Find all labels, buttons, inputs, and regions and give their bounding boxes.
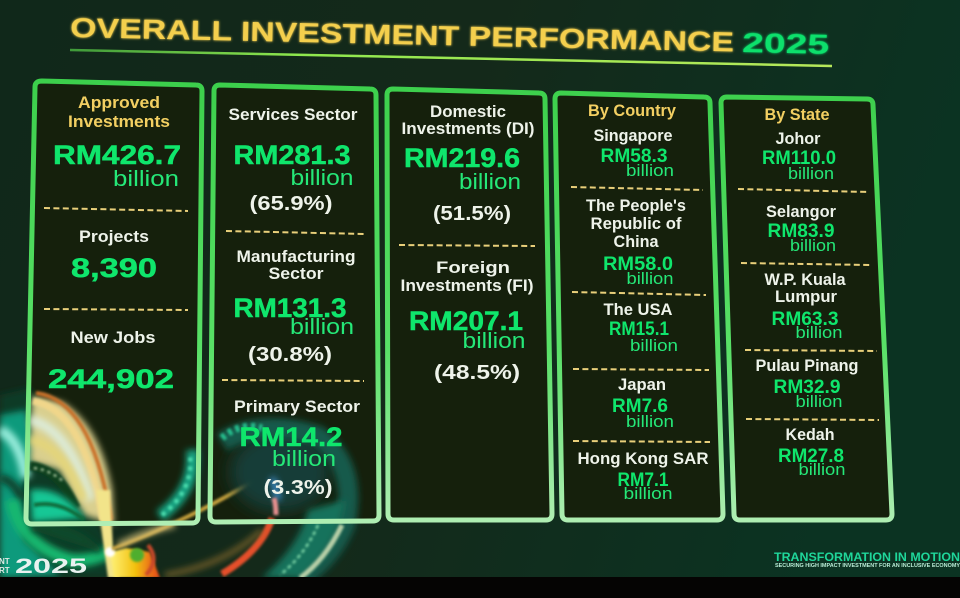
label: domestic investments: Domestic bbox=[430, 102, 506, 121]
panel: by country: China bbox=[614, 232, 659, 251]
panel: by state: billion bbox=[788, 164, 834, 183]
panel: domestic and foreign: Investments (FI) bbox=[400, 276, 534, 295]
panel: sectors: billion bbox=[290, 314, 354, 339]
value: services: RM281.3 bbox=[234, 140, 350, 170]
title year: 2025 bbox=[742, 27, 830, 60]
footer: tagline right: TRANSFORMATION IN MOTION bbox=[774, 552, 960, 564]
title underline bbox=[70, 50, 832, 66]
panel: sectors bbox=[210, 85, 379, 522]
panel: domestic and foreign bbox=[387, 89, 552, 520]
entry: hong kong: Hong Kong SAR bbox=[578, 449, 708, 468]
footer: report label left bbox=[0, 555, 87, 578]
panel: domestic and foreign: billion bbox=[459, 169, 521, 194]
panel: by state bbox=[721, 97, 892, 520]
panel: domestic and foreign: billion bbox=[462, 328, 526, 353]
panel: by state: billion bbox=[796, 323, 842, 342]
panel: by state: RM27.8 bbox=[778, 446, 844, 467]
label: projects: Projects bbox=[79, 227, 149, 246]
panel: by country: RM7.1 bbox=[618, 470, 669, 491]
value: manufacturing: RM131.3 bbox=[234, 293, 346, 323]
entry: singapore: Singapore bbox=[594, 126, 672, 145]
label: foreign investments: Foreign bbox=[436, 258, 510, 277]
panel: by country: RM58.0 bbox=[603, 254, 673, 275]
panel: by country: RM58.3 bbox=[600, 146, 668, 167]
panel: sectors: (65.9%) bbox=[250, 193, 332, 215]
swirl artwork bbox=[0, 388, 348, 578]
title bbox=[70, 12, 830, 60]
panel: by state: RM32.9 bbox=[774, 377, 840, 398]
panel: by state: RM83.9 bbox=[768, 221, 834, 242]
panel: by state: RM63.3 bbox=[772, 309, 838, 330]
value: primary: RM14.2 bbox=[240, 422, 342, 452]
entry: selangor: Selangor bbox=[766, 202, 836, 221]
panel: by country: Republic of bbox=[590, 214, 682, 233]
panel: by country: RM15.1 bbox=[609, 319, 669, 340]
label: manufacturing sector: Manufacturing bbox=[236, 247, 356, 266]
value: approved amount: RM426.7 bbox=[53, 140, 181, 170]
entry: kuala lumpur: W.P. Kuala bbox=[764, 270, 846, 289]
footer year: 2025 bbox=[15, 555, 87, 578]
label: new jobs: New Jobs bbox=[70, 328, 156, 347]
panel: domestic and foreign: (51.5%) bbox=[433, 203, 511, 225]
panel: approved investments: Investments bbox=[68, 112, 170, 131]
panel: sectors: billion bbox=[290, 165, 354, 190]
panel: by state: RM110.0 bbox=[762, 148, 836, 169]
panel: by state: billion bbox=[790, 236, 836, 255]
entry: kedah: Kedah bbox=[786, 425, 834, 444]
value: new jobs: 244,902 bbox=[48, 364, 174, 394]
panel: approved investments bbox=[26, 81, 202, 524]
panel: sectors: (3.3%) bbox=[264, 477, 332, 499]
panel: by country: billion bbox=[624, 484, 672, 503]
panel: by country: RM7.6 bbox=[612, 396, 668, 417]
heading: by state: By State bbox=[764, 105, 830, 124]
value: domestic: RM219.6 bbox=[404, 143, 520, 173]
panel: sectors: (30.8%) bbox=[248, 344, 332, 366]
footer: tagline right bbox=[774, 552, 960, 569]
panel: sectors: billion bbox=[272, 446, 336, 471]
label: services sector: Services Sector bbox=[228, 105, 358, 124]
panel: approved investments: billion bbox=[113, 166, 179, 191]
panel: by country bbox=[555, 93, 723, 520]
panel backgrounds bbox=[26, 81, 892, 524]
value: projects: 8,390 bbox=[71, 253, 157, 283]
footer: tagline right: SECURING HIGH IMPACT INVESTMENT FOR AN INCLUSIVE ECONOMY bbox=[775, 563, 960, 569]
panel: domestic and foreign: Investments (DI) bbox=[402, 119, 534, 138]
panel: by country: billion bbox=[630, 336, 678, 355]
entry: usa: The USA bbox=[604, 300, 672, 319]
label: primary sector: Primary Sector bbox=[234, 397, 360, 416]
entry: japan: Japan bbox=[618, 375, 666, 394]
entry: pulau pinang: Pulau Pinang bbox=[756, 356, 858, 375]
entry: china: The People's bbox=[586, 196, 686, 215]
panel: by state: billion bbox=[796, 392, 842, 411]
bottom screen edge bbox=[0, 577, 960, 598]
title: OVERALL INVESTMENT PERFORMANCE bbox=[70, 12, 734, 57]
entry: johor: Johor bbox=[776, 129, 821, 148]
panel: domestic and foreign: (48.5%) bbox=[434, 362, 520, 384]
panel: by state: Lumpur bbox=[775, 287, 837, 306]
panel: sectors: Sector bbox=[268, 264, 324, 283]
panel: by state: billion bbox=[798, 460, 846, 479]
panel: by country: billion bbox=[626, 269, 674, 288]
value: foreign: RM207.1 bbox=[409, 306, 523, 336]
panel: by country: billion bbox=[626, 412, 674, 431]
panel: by country: billion bbox=[626, 161, 674, 180]
heading: by country: By Country bbox=[588, 101, 677, 120]
heading: approved investments: Approved bbox=[78, 93, 160, 112]
